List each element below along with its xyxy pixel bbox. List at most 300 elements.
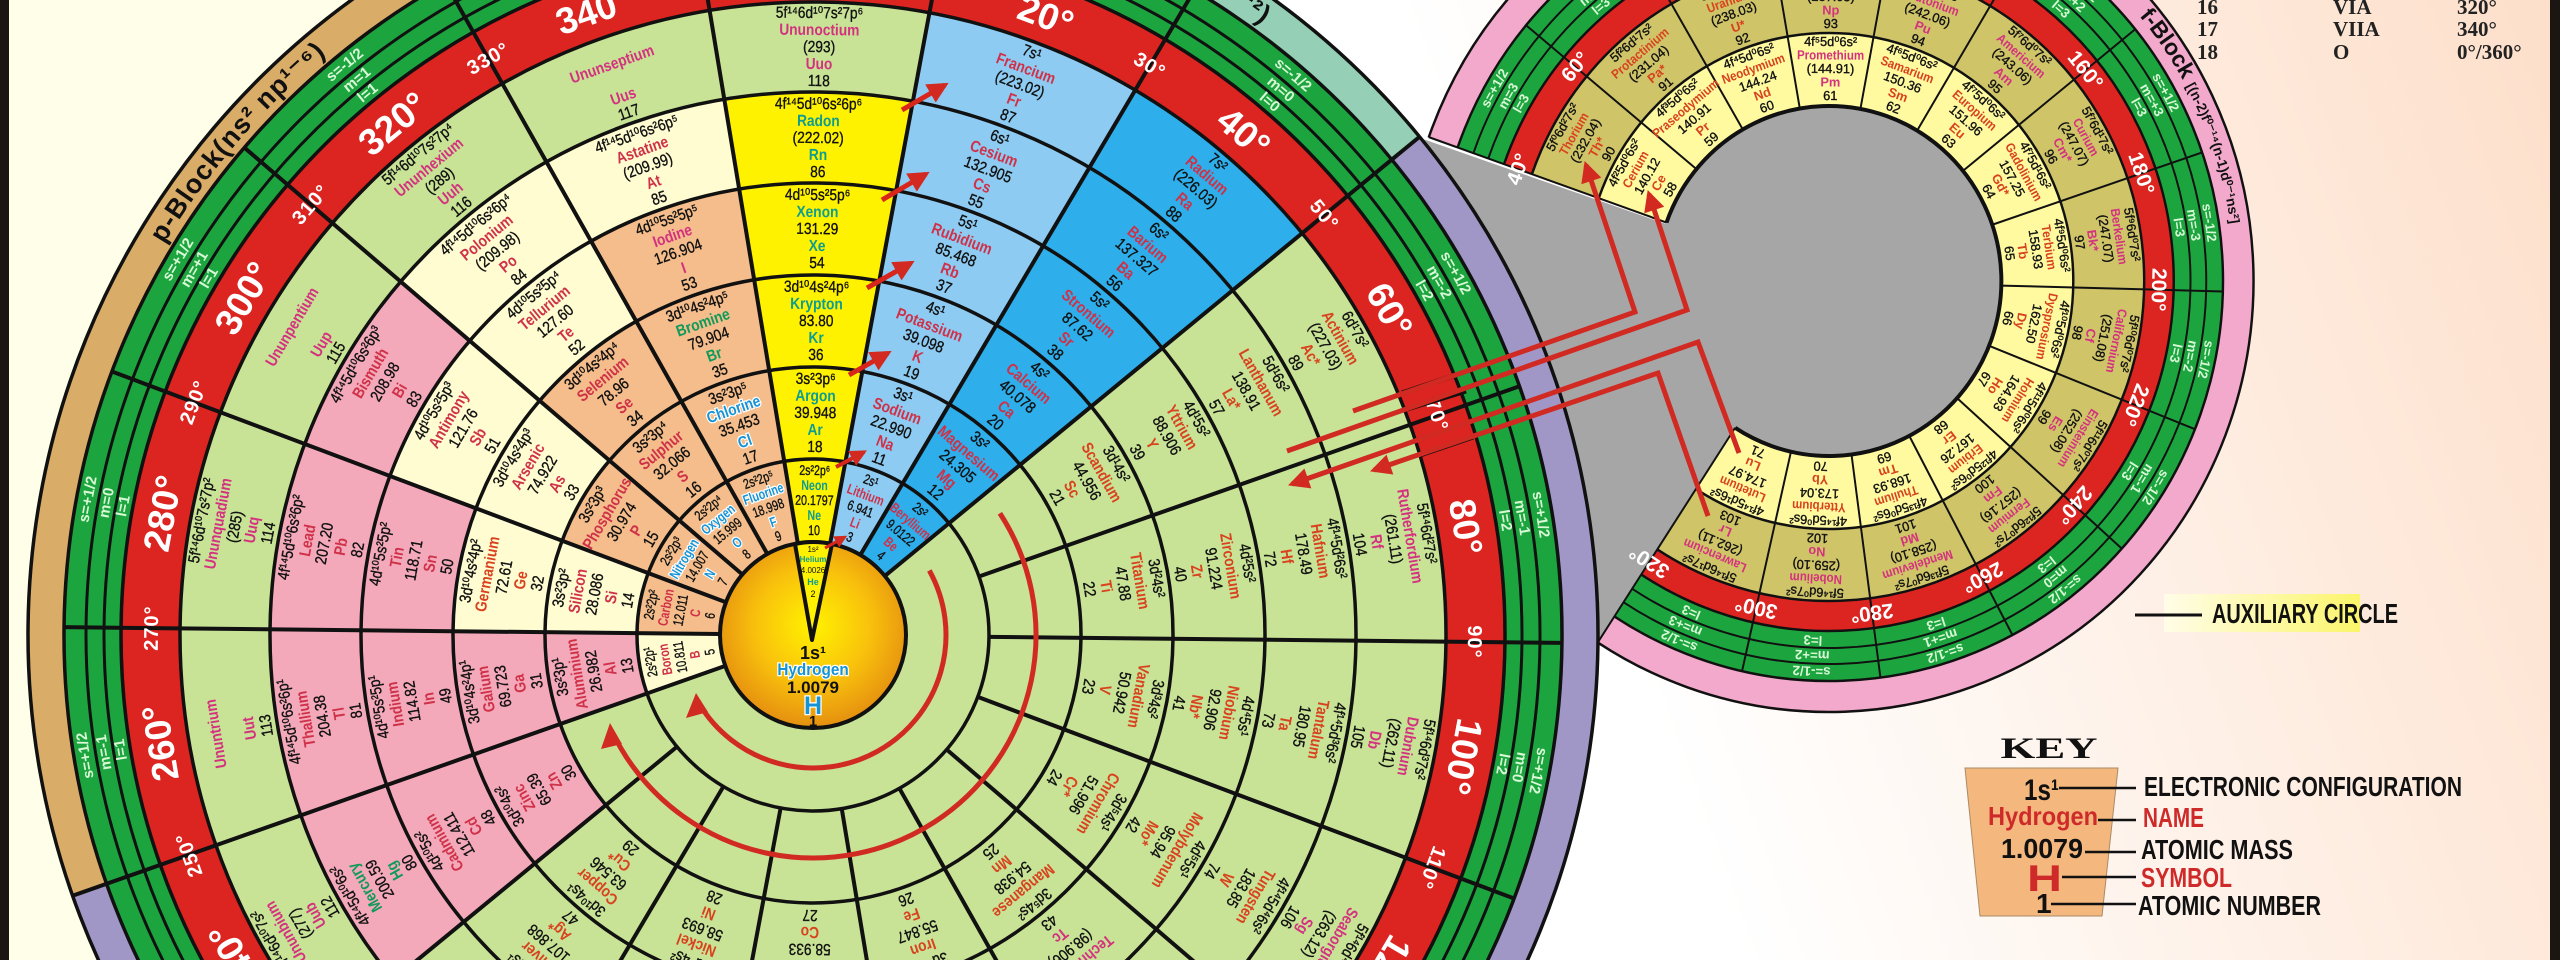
quantum numbers: main wheel: m=0 bbox=[1508, 751, 1530, 784]
element: Nitrogen: N bbox=[701, 567, 719, 581]
element: Radium: Ra bbox=[1172, 189, 1198, 215]
element: Samarium: Sm bbox=[1886, 84, 1910, 105]
outer block band: s-block bbox=[0, 0, 1708, 960]
element: Manganese: 54.938 bbox=[990, 857, 1034, 898]
element: Samarium: 62 bbox=[1884, 98, 1903, 117]
element: Uranium: U* bbox=[1729, 17, 1747, 36]
element: Vanadium: 50.942 bbox=[1109, 670, 1134, 715]
big angle labels: 280° bbox=[136, 472, 190, 555]
group table fragment: O bbox=[2333, 40, 2349, 64]
element: Europium: 63 bbox=[1938, 130, 1959, 151]
element: Holmium: 67 bbox=[1974, 369, 1994, 389]
element: Ununoctium: 118 bbox=[808, 72, 830, 90]
element: Californium: (251.08) bbox=[2091, 313, 2116, 363]
hydrogen text: 1 bbox=[809, 713, 817, 730]
element: Bismuth: Bi bbox=[389, 380, 411, 401]
element: Americium: 95 bbox=[1985, 76, 2005, 97]
element: Titanium: Titanium bbox=[1126, 551, 1153, 611]
element: Aluminium: 26.982 bbox=[582, 649, 607, 693]
element: Dubnium: (262.11) bbox=[1377, 717, 1404, 769]
element: Ununpentium: 115 bbox=[323, 339, 350, 367]
element: Lithium: Lithium bbox=[845, 481, 886, 509]
hydrogen text: 1s¹ bbox=[800, 643, 826, 663]
quantum numbers: f-block: s=-1/2 bbox=[2139, 467, 2172, 508]
angle labels: 60° bbox=[1557, 47, 1594, 87]
element: Tungsten bbox=[1188, 839, 1294, 937]
element: Cobalt: Co bbox=[801, 923, 819, 941]
big angle labels: 60° bbox=[1358, 276, 1421, 345]
element: Germanium: Ge bbox=[511, 570, 532, 591]
element: Magnesium: Mg bbox=[933, 466, 960, 493]
element: Titanium: 22 bbox=[1079, 580, 1099, 598]
element: Mendelevium: Md bbox=[1899, 529, 1921, 549]
element: Francium: (223.02) bbox=[993, 67, 1047, 102]
element: Erbium: 4f¹²5d⁰6s² bbox=[1947, 446, 2001, 494]
element: Actinium: 6d¹7s² bbox=[1337, 308, 1372, 351]
element: Iodine: 4d¹⁰5s²5p⁵ bbox=[633, 201, 701, 240]
element: Thorium: Thorium bbox=[1556, 110, 1592, 158]
quantum numbers: main wheel bbox=[73, 42, 1558, 795]
element: Praseodymium: 140.91 bbox=[1674, 100, 1714, 137]
element: Ununbium: 112 bbox=[317, 893, 344, 921]
element: Einsteinium: (252.08) bbox=[2048, 407, 2086, 456]
angle labels: 240° bbox=[2051, 481, 2097, 529]
element: Lutetium: 174.97 bbox=[1727, 462, 1768, 491]
element: Carbon: 6 bbox=[702, 611, 719, 620]
element: Galium bbox=[456, 647, 551, 725]
element: Chromium: Cr* bbox=[1055, 773, 1082, 800]
element: Polonium: Polonium bbox=[457, 211, 517, 265]
element: Rubidium: 37 bbox=[933, 276, 954, 298]
small angle labels: 250° bbox=[172, 830, 207, 880]
quantum numbers: main wheel: s=-1/2 bbox=[323, 45, 367, 85]
element: Aluminium bbox=[546, 629, 642, 713]
element: Galium: 69.723 bbox=[491, 664, 516, 708]
element: Copper: 3d¹⁰4s¹ bbox=[564, 878, 609, 920]
element: Americium: 5f⁷6d⁰7s² bbox=[2005, 22, 2055, 69]
element: Magnesium bbox=[901, 409, 1014, 524]
element: Tin: 4d¹⁰5s²5p² bbox=[366, 521, 396, 587]
quantum numbers: f-block: m=+1 bbox=[1921, 625, 1959, 651]
element: Bromine: 35 bbox=[710, 360, 730, 382]
element: Lead: 4f¹⁴5d¹⁰6s²6p² bbox=[274, 493, 308, 581]
element: Erbium: 68 bbox=[1931, 417, 1951, 438]
element: Ununoctium: Ununoctium bbox=[779, 21, 860, 40]
element: Silicon: 28.086 bbox=[582, 572, 608, 617]
element: Thulium: Tm bbox=[1877, 461, 1900, 481]
element: Yttrium bbox=[1117, 394, 1216, 478]
element: Cesium: Cs bbox=[970, 174, 993, 197]
quantum numbers: main wheel: s=+1/2 bbox=[73, 731, 98, 780]
element: Zinc: 65.39 bbox=[523, 770, 556, 809]
element: Chlorine: 17 bbox=[740, 447, 761, 469]
element: Protactinium bbox=[1600, 14, 1697, 113]
element: Argon bbox=[794, 370, 837, 457]
element: Neodymium bbox=[1715, 37, 1800, 125]
element: Dysprosium: Dysprosium bbox=[2033, 292, 2061, 361]
element: Aluminium: 13 bbox=[617, 657, 638, 675]
element: Cesium: 132.905 bbox=[961, 153, 1014, 187]
group table fragment: VIIA bbox=[2333, 17, 2381, 41]
quantum numbers: f-block: m=+3 bbox=[1667, 612, 1704, 640]
big angle labels: 300° bbox=[206, 255, 281, 342]
element: Thulium: 168.93 bbox=[1871, 470, 1913, 497]
element: Argon: 39.948 bbox=[794, 404, 836, 423]
element: Lanthanum: 138.91 bbox=[1228, 368, 1264, 414]
element: Lanthanum: 5d¹6s² bbox=[1258, 353, 1293, 396]
element: Fermium: 5f¹²6d⁰7s² bbox=[1990, 503, 2044, 551]
element: Astatine: 85 bbox=[649, 187, 670, 210]
element: Rutherfordium: Rutherfordium bbox=[1393, 488, 1426, 585]
quantum numbers: main wheel: l=0 bbox=[1256, 89, 1283, 116]
small angle labels: 270° bbox=[141, 605, 163, 651]
key title: KEY bbox=[2000, 732, 2098, 765]
long arrow: lutetium link back bbox=[1292, 342, 1739, 484]
element: Neon bbox=[795, 462, 834, 539]
element: Protactinium: Protactinium bbox=[1608, 25, 1672, 82]
element: Beryllium: 4 bbox=[874, 548, 888, 564]
element: Praseodymium: 59 bbox=[1701, 129, 1722, 150]
helium wedge bbox=[795, 542, 832, 640]
shadow strokes over red band bbox=[1402, 375, 1473, 455]
element: Ununpentium bbox=[262, 284, 367, 396]
element: Seaborgium: 106 bbox=[1276, 902, 1303, 931]
element: Antimony: 4d¹⁰5s²5p³ bbox=[410, 379, 459, 443]
element: Indium bbox=[365, 662, 460, 740]
element: Cerium: Ce bbox=[1648, 172, 1669, 194]
element: Nitrogen: 7 bbox=[715, 575, 731, 588]
element: Selenium: 3d¹⁰4s²4p⁴ bbox=[561, 338, 623, 394]
element: Ununpentium: Ununpentium bbox=[262, 284, 323, 370]
right border bar bbox=[2550, 0, 2560, 960]
element: Nickel: Nickel bbox=[674, 929, 719, 960]
element: Titanium bbox=[1075, 549, 1170, 619]
olive 5f ring bbox=[1472, 0, 2186, 644]
element: Germanium: 32 bbox=[528, 574, 548, 593]
element: Francium: Francium bbox=[994, 49, 1058, 88]
element: Lawrencium bbox=[1676, 498, 1764, 588]
element: Nitrogen: 14.007 bbox=[682, 548, 712, 585]
element: Molybdenum: 42 bbox=[1121, 813, 1145, 835]
element: Barium: 56 bbox=[1102, 272, 1126, 295]
element: Radon: Radon bbox=[797, 112, 840, 131]
quantum numbers: f-block: s=+1/2 bbox=[2149, 70, 2182, 114]
element: Strontium: 5s² bbox=[1086, 288, 1112, 314]
angle labels: 260° bbox=[1958, 557, 2007, 597]
element: Gadolinium: Gd* bbox=[1989, 171, 2013, 199]
element: Oxygen: 8 bbox=[739, 546, 754, 562]
element: Zirconium: Zirconium bbox=[1216, 532, 1245, 600]
quantum numbers: f-block: l=3 bbox=[1925, 614, 1947, 634]
heading: p-block: p-Block(ns² np¹⁻⁶) bbox=[152, 42, 326, 246]
element: Einsteinium: 99 bbox=[2034, 407, 2054, 427]
angle labels: 160° bbox=[2063, 46, 2107, 95]
element: Xenon bbox=[784, 186, 850, 273]
element: Dysprosium bbox=[1994, 284, 2074, 364]
element: Nickel: Ni bbox=[699, 902, 718, 924]
element: Germanium: 72.61 bbox=[492, 559, 517, 596]
angle labels: 220° bbox=[2117, 381, 2154, 429]
element: Xenon: Xe bbox=[809, 237, 826, 255]
element: Cesium: Cesium bbox=[967, 137, 1020, 171]
element: Niobium: 4d⁴5s¹ bbox=[1233, 694, 1258, 737]
element: Tellurium: Tellurium bbox=[515, 282, 574, 335]
quantum numbers: main wheel: s=-1/2 bbox=[1271, 55, 1315, 95]
element: Strontium bbox=[1024, 273, 1130, 381]
element: Radium: (226.03) bbox=[1170, 165, 1221, 212]
element: Silicon: 3s²3p² bbox=[549, 567, 574, 609]
element: Lutetium: Lu bbox=[1743, 454, 1763, 474]
element: Dysprosium: 4f¹⁰5d⁰6s² bbox=[2047, 299, 2073, 360]
element: Ununquadium bbox=[184, 474, 286, 580]
element: Galium: Ga bbox=[510, 672, 531, 694]
element: Nickel bbox=[668, 881, 737, 960]
element: Selenium: Selenium bbox=[574, 353, 632, 406]
element: Lawrencium: 103 bbox=[1718, 507, 1743, 529]
quantum numbers: main wheel: m=1 bbox=[340, 64, 374, 96]
element: Lanthanum: Lanthanum bbox=[1235, 346, 1287, 420]
element: Lawrencium: (262.11) bbox=[1696, 527, 1744, 559]
non-metals in peach bbox=[437, 259, 1189, 960]
element: Astatine bbox=[592, 111, 704, 222]
element: Chlorine: Chlorine bbox=[704, 392, 763, 428]
element: Thallium: Thallium bbox=[292, 690, 320, 748]
element: Ununtrium: Ununtrium bbox=[202, 698, 231, 770]
element: Ununtrium: 113 bbox=[256, 713, 277, 738]
element: Arsenic: Arsenic bbox=[508, 440, 549, 493]
heading: f-block: f-Block [(n-2)f⁰⁻¹⁴(n-1)d⁰⁻¹ns²] bbox=[2140, 8, 2240, 224]
element: Chromium: 3d⁵4s¹ bbox=[1094, 790, 1130, 834]
element: Einsteinium bbox=[2021, 385, 2113, 478]
element: Krypton bbox=[783, 278, 849, 365]
element: Zinc: 3d¹⁰4s² bbox=[491, 782, 529, 830]
element: Carbon bbox=[640, 585, 721, 636]
element: Plutonium bbox=[1889, 0, 1966, 57]
element: Silicon: 14 bbox=[618, 591, 639, 610]
element: Rutherfordium: 104 bbox=[1349, 532, 1370, 557]
element: Europium: Eu bbox=[1946, 119, 1969, 142]
element: Dysprosium: 162.50 bbox=[2023, 303, 2045, 345]
element: Holmium: Ho bbox=[1985, 375, 2006, 398]
element: Zinc: 30 bbox=[558, 761, 581, 784]
element: Calcium: 40.078 bbox=[995, 376, 1039, 417]
group table fragment: 17 bbox=[2197, 17, 2218, 41]
element: Francium: Fr bbox=[1004, 90, 1024, 112]
element: Fluorine: 9 bbox=[773, 528, 784, 545]
element: Mendelevium bbox=[1869, 508, 1959, 596]
quantum numbers: main wheel: s=+1/2 bbox=[1437, 248, 1474, 297]
quantum numbers: f-block: s=-1/2 bbox=[2046, 571, 2085, 607]
element: Sodium bbox=[852, 378, 930, 477]
element: Technetium: Tc bbox=[1048, 924, 1071, 947]
element: Sulphur: 16 bbox=[682, 478, 705, 502]
element: Strontium: 87.62 bbox=[1058, 309, 1096, 345]
quantum numbers: main wheel: m=-2 bbox=[1423, 263, 1455, 302]
callout: auxiliary circle: AUXILIARY CIRCLE bbox=[2212, 598, 2398, 629]
element: Tin bbox=[366, 521, 462, 600]
element: Tungsten: Tungsten bbox=[1232, 866, 1279, 927]
element: Plutonium: Pu bbox=[1913, 17, 1933, 37]
element: Dubnium: Dubnium bbox=[1393, 715, 1422, 777]
element: Gadolinium: 157.25 bbox=[1996, 157, 2028, 199]
element: Ununtrium bbox=[202, 690, 281, 770]
element: Boron: 10.811 bbox=[670, 640, 691, 674]
element: Tellurium: 52 bbox=[565, 336, 589, 360]
element: Calcium: Ca bbox=[994, 397, 1019, 423]
element: Neodymium: 4f⁴5d⁰6s² bbox=[1721, 39, 1777, 72]
red angle band bbox=[144, 0, 1482, 960]
quantum numbers: main wheel: l=1 bbox=[354, 80, 381, 106]
element: Cesium: 6s¹ bbox=[988, 126, 1012, 150]
element: Yttrium: 88.906 bbox=[1148, 413, 1185, 459]
element: Carbon: 2s²2p² bbox=[641, 588, 662, 621]
element: Galium: 31 bbox=[527, 672, 547, 690]
element: Magnesium: Magnesium bbox=[934, 422, 1003, 485]
quantum numbers: f-block: s=-1/2 bbox=[1925, 640, 1966, 666]
quantum numbers: f-block: s=-1/2 bbox=[2195, 339, 2217, 380]
element: Actinium: Actinium bbox=[1318, 308, 1362, 368]
element: Astatine: At bbox=[644, 171, 664, 193]
angle labels: 280° bbox=[1849, 598, 1895, 627]
small angle labels: 330° bbox=[463, 38, 514, 80]
key labels bbox=[2138, 771, 2462, 921]
element: Thorium: Th* bbox=[1585, 134, 1608, 160]
element: Fermium: Fm bbox=[1981, 483, 2005, 507]
element: Ununbium: (277) bbox=[285, 905, 317, 942]
element: Samarium bbox=[1865, 40, 1941, 124]
element: Copper: Copper bbox=[573, 863, 622, 909]
element: Mercury bbox=[326, 829, 434, 929]
element: Lithium bbox=[829, 467, 892, 551]
element: Selenium: 34 bbox=[624, 407, 647, 431]
element: Rutherfordium bbox=[1343, 485, 1443, 593]
element: Nitrogen: Nitrogen bbox=[666, 536, 702, 582]
group table fragment: 0°/360° bbox=[2457, 40, 2522, 64]
element: Yttrium: 4d¹5s² bbox=[1179, 398, 1214, 441]
element: Tantalum: Ta bbox=[1274, 714, 1295, 733]
green quantum band bbox=[1358, 0, 2300, 760]
element: Barium bbox=[1089, 209, 1183, 307]
element: Scandium: 44.956 bbox=[1068, 458, 1105, 504]
element: Titanium: 3d²4s² bbox=[1144, 557, 1168, 599]
element: Arsenic: 74.922 bbox=[524, 453, 561, 498]
quantum numbers: f-block: l=3 bbox=[1510, 91, 1532, 115]
key labels: NAME bbox=[2143, 802, 2204, 833]
hydrogen text: Hydrogen bbox=[777, 660, 849, 679]
element: Lutetium bbox=[1708, 433, 1787, 520]
element: Beryllium: 9.0122 bbox=[883, 516, 918, 549]
element: Fluorine: 18.998 bbox=[750, 495, 786, 521]
element: Astatine: Astatine bbox=[614, 133, 671, 168]
long arrow: actinide link to thorium bbox=[1353, 165, 1635, 411]
element: Neon: Neon bbox=[801, 477, 828, 494]
small angle labels: 110° bbox=[1414, 843, 1450, 892]
element: Boron: 2s²2p¹ bbox=[640, 646, 661, 678]
element: Antimony: Antimony bbox=[425, 387, 473, 452]
element: Titanium: 47.88 bbox=[1111, 565, 1134, 602]
element: Silver bbox=[502, 894, 596, 960]
element: Radium bbox=[1148, 139, 1243, 238]
element: Potassium: 4s¹ bbox=[923, 298, 948, 321]
element: Xenon: 54 bbox=[809, 254, 825, 272]
element: Ununoctium: (293) bbox=[803, 38, 835, 56]
quantum numbers: f-block: m=3 bbox=[1495, 80, 1521, 112]
element: Rubidium: 5s¹ bbox=[956, 211, 980, 235]
quantum numbers: f-block: m=-3 bbox=[2184, 208, 2203, 242]
element: Curium: 96 bbox=[2041, 147, 2061, 167]
element: Erbium bbox=[1914, 404, 2001, 494]
element: Nickel: 28 bbox=[704, 886, 725, 908]
element: Vanadium bbox=[1073, 653, 1170, 733]
element: Mercury: 200.59 bbox=[362, 856, 398, 902]
element: Thallium: 4f¹⁴5d¹⁰6s²6p¹ bbox=[273, 678, 305, 766]
element: Ununhexium bbox=[379, 120, 501, 242]
key cell text: 1s¹ bbox=[2024, 774, 2059, 807]
element: Lead: 207.20 bbox=[312, 521, 337, 566]
element: Ytterbium: Ytterbium bbox=[1792, 498, 1846, 515]
element: Dubnium bbox=[1343, 705, 1439, 781]
element: Phosphorus: P bbox=[627, 522, 647, 539]
element: Berkelium: Berkelium bbox=[2108, 207, 2130, 266]
element: Gadolinium: 4f⁷5d¹6s² bbox=[2017, 139, 2055, 192]
element: Germanium bbox=[455, 532, 554, 623]
element: Uranium bbox=[1698, 0, 1770, 55]
element: Lead: Pb bbox=[331, 536, 352, 557]
element: Silver: 47 bbox=[559, 905, 583, 929]
element: Zirconium bbox=[1165, 529, 1261, 609]
big angle labels: 40° bbox=[1209, 99, 1278, 167]
pink outer band bbox=[1307, 0, 2351, 811]
element: Strontium: Strontium bbox=[1058, 286, 1119, 342]
big angle labels bbox=[131, 0, 1498, 960]
quantum numbers: f-block: l=3 bbox=[1803, 632, 1823, 648]
angle labels: 180° bbox=[2123, 149, 2159, 198]
element: Tantalum bbox=[1253, 689, 1349, 764]
element: Praseodymium: 4f³5d⁰6s² bbox=[1652, 75, 1702, 121]
element: Thulium bbox=[1854, 442, 1929, 525]
small angle labels: 90° bbox=[1463, 625, 1485, 659]
element: Silicon: Silicon bbox=[565, 567, 591, 615]
element: Selenium: 78.96 bbox=[595, 375, 633, 410]
element: Nitrogen: 2s²2p³ bbox=[657, 534, 686, 568]
element: Barium: 6s² bbox=[1145, 219, 1172, 245]
quantum numbers: main wheel: m=0 bbox=[1263, 73, 1298, 106]
alkaline earth column bbox=[316, 138, 1310, 960]
group table fragment bbox=[2197, 0, 2522, 64]
element: Sulphur: 3s²3p⁴ bbox=[629, 417, 672, 457]
element: Yttrium: Y bbox=[1142, 436, 1162, 453]
element: Nobelium: No bbox=[1808, 544, 1826, 560]
helium wedge: 4.0026 bbox=[801, 566, 826, 575]
element: Ununquadium: (285) bbox=[223, 509, 247, 544]
element: Plutonium: (242.06) bbox=[1903, 0, 1953, 30]
element: Fluorine: Fluorine bbox=[741, 480, 786, 508]
element: Xenon: Xenon bbox=[796, 203, 839, 222]
element: Copper: 29 bbox=[619, 836, 643, 859]
element: Cerium: 58 bbox=[1660, 179, 1680, 199]
element: Tantalum: 4f¹⁴5d³6s² bbox=[1320, 701, 1349, 764]
element: Selenium bbox=[561, 338, 667, 447]
element: Krypton: Kr bbox=[808, 329, 824, 347]
quantum numbers: main wheel: s=+1/2 bbox=[1525, 746, 1551, 795]
element: Polonium: 4f¹⁴5d¹⁰6s²6p⁴ bbox=[436, 190, 516, 260]
element: Iron: Fe bbox=[901, 904, 922, 926]
element: Promethium bbox=[1797, 34, 1864, 103]
element: Calcium: 4s² bbox=[1026, 358, 1053, 384]
ring outlines bbox=[20, 0, 1606, 960]
element: Tin: 50 bbox=[437, 557, 458, 576]
element: Ununseptium: Uus bbox=[608, 84, 639, 109]
